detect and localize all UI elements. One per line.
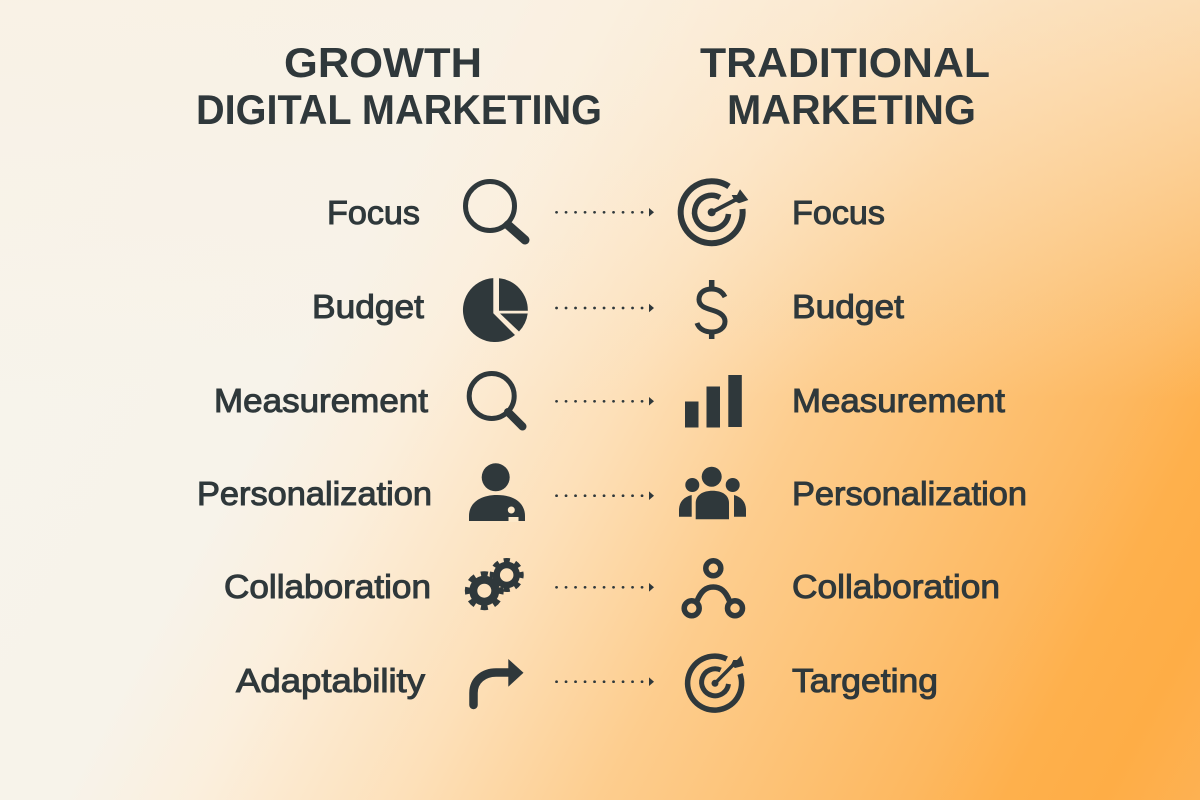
arrow: collaboration xyxy=(556,583,654,592)
arrow: measurement xyxy=(556,397,654,406)
title: growth digital marketing xyxy=(196,39,602,133)
title: traditional marketing: TRADITIONAL xyxy=(700,39,990,86)
title: growth digital marketing: DIGITAL MARKETING xyxy=(196,86,602,133)
left column labels: Collaboration xyxy=(224,568,431,605)
left column labels: Adaptability xyxy=(236,662,426,699)
arrow: personalization xyxy=(556,491,654,500)
icon: network collaboration xyxy=(684,561,742,616)
arrow: focus xyxy=(556,208,654,216)
icon: curved arrow adaptability xyxy=(474,659,524,705)
icon: people group personalization xyxy=(679,467,746,519)
right column labels: Targeting xyxy=(792,662,938,699)
right column labels: Collaboration xyxy=(792,568,1000,605)
arrow: budget xyxy=(556,304,654,312)
left column labels: Focus xyxy=(327,194,420,231)
left column labels xyxy=(197,194,432,699)
right column labels: Focus xyxy=(792,194,885,231)
icon: dollar sign budget xyxy=(697,280,725,339)
icon: person personalization xyxy=(469,463,525,522)
icon: magnifier measurement xyxy=(469,374,522,426)
icon: target focus xyxy=(681,181,748,243)
right column labels xyxy=(792,194,1027,699)
icon: bar chart measurement xyxy=(685,375,742,428)
icon: gears collaboration xyxy=(464,558,524,611)
title: traditional marketing: MARKETING xyxy=(727,86,976,133)
left column labels: Personalization xyxy=(197,475,432,512)
right column labels: Measurement xyxy=(792,382,1005,419)
icon: pie chart budget xyxy=(463,278,528,342)
title: growth digital marketing: GROWTH xyxy=(284,39,482,86)
title: traditional marketing xyxy=(700,39,990,133)
left column labels: Budget xyxy=(312,288,424,325)
arrow: adaptability xyxy=(556,677,654,686)
right column labels: Budget xyxy=(792,288,904,325)
left column labels: Measurement xyxy=(214,382,428,419)
icon: target with arrow xyxy=(688,656,744,710)
icon: magnifier focus xyxy=(466,182,525,240)
right column labels: Personalization xyxy=(792,475,1027,512)
